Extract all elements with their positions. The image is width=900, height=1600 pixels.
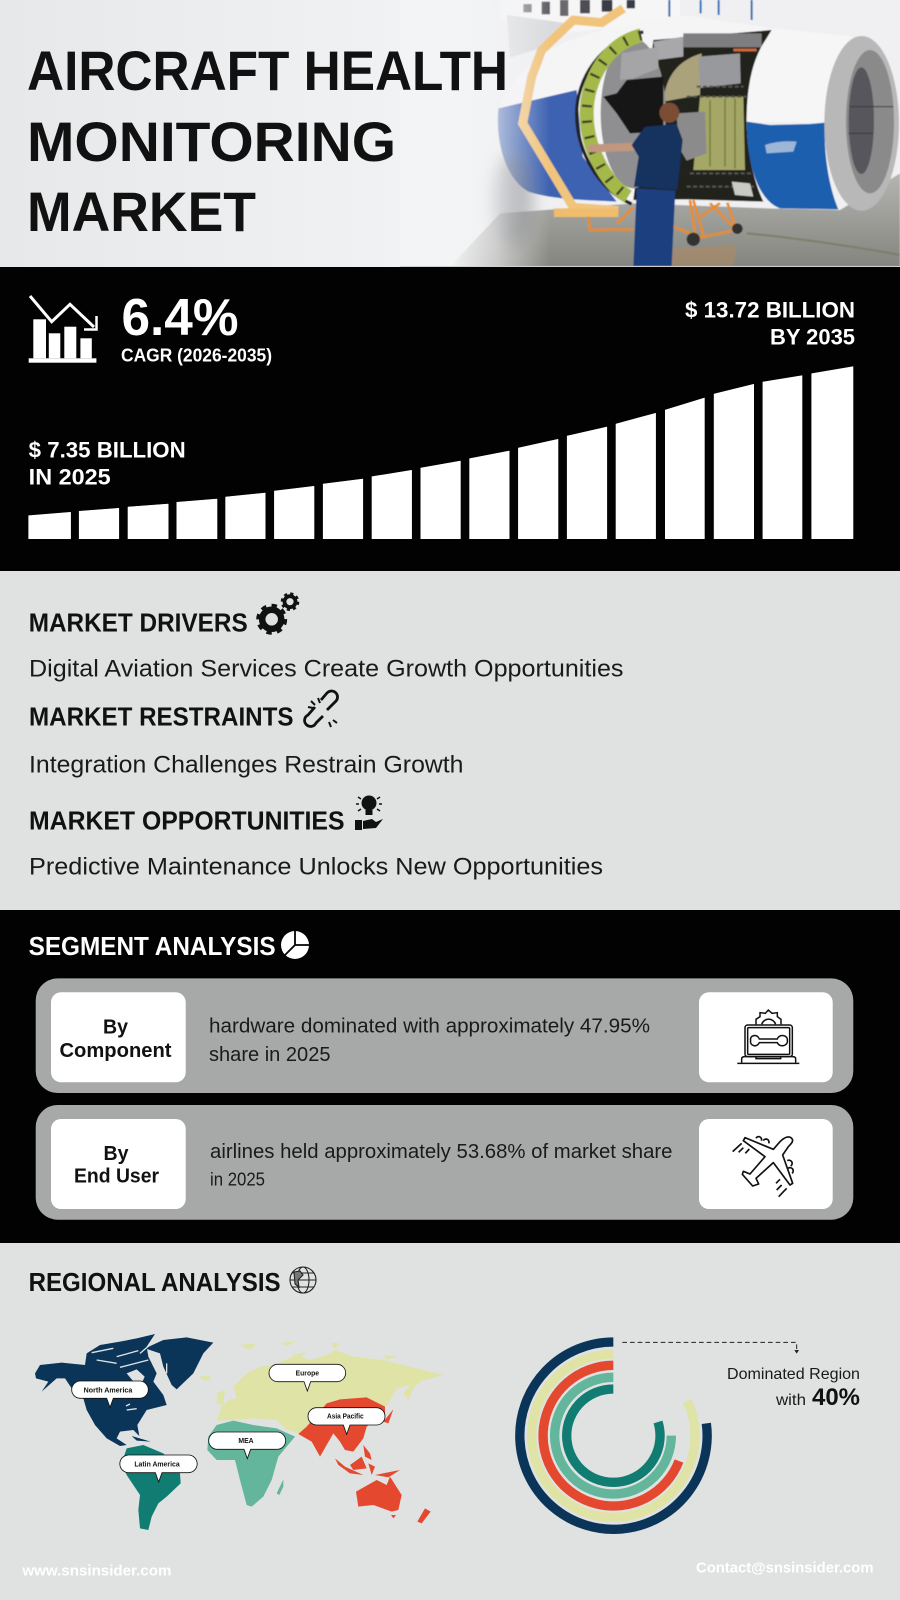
title (27, 39, 508, 243)
icon: laptop with wrench (737, 1010, 799, 1063)
text: end user finding: airlines held approximately 53.68% of market share (210, 1141, 672, 1163)
region: Europe and North Asia (200, 1342, 443, 1433)
icon: chart with declining arrow (29, 296, 97, 363)
2035 value: $ 13.72 BILLION (685, 298, 855, 323)
text: driver: Digital Aviation Services Create Growth Opportunities (29, 656, 624, 683)
icon: airplane (733, 1137, 793, 1197)
callout: Latin America (120, 1455, 197, 1482)
label: by end user: By (104, 1143, 129, 1165)
heading: market drivers: MARKET DRIVERS (29, 610, 248, 638)
heading: market opportunities: MARKET OPPORTUNITIES (29, 807, 344, 835)
text: component finding: share in 2025 (209, 1044, 330, 1066)
callout: Europe (269, 1364, 346, 1391)
title: AIRCRAFT HEALTH (27, 39, 508, 102)
CAGR label: CAGR (2026-2035) (121, 346, 272, 366)
callout: MEA: MEA (238, 1438, 254, 1445)
panel: market dynamics (0, 571, 900, 910)
icon: pie chart (281, 931, 309, 959)
panel: market size (0, 267, 900, 571)
2035 value: BY 2035 (770, 325, 855, 350)
callout: Latin America: Latin America (134, 1461, 180, 1468)
label: by end user: End User (74, 1166, 159, 1188)
panel: header (0, 0, 900, 267)
2025 value (29, 438, 186, 490)
title: MARKET (27, 180, 256, 243)
callout: dominated region: 40% (812, 1384, 860, 1411)
label: by component: By (103, 1017, 129, 1039)
footer: contact: Contact@snsinsider.com (696, 1560, 874, 1576)
2025 value: IN 2025 (29, 465, 111, 490)
callout: dominated region: with (775, 1392, 806, 1409)
world map (35, 1334, 443, 1530)
row: by end user (36, 1105, 853, 1220)
heading: market restraints: MARKET RESTRAINTS (29, 704, 294, 732)
text: opportunity: Predictive Maintenance Unlocks New Opportunities (29, 853, 603, 880)
panel: segment analysis (0, 910, 900, 1243)
callout: North America (72, 1381, 148, 1407)
region: North America (35, 1334, 213, 1446)
icon: bulb in hand (355, 796, 383, 830)
row: by component (36, 978, 853, 1093)
label: by component (60, 1017, 172, 1062)
heading: regional analysis: REGIONAL ANALYSIS (29, 1269, 281, 1297)
CAGR value: 6.4% (122, 289, 238, 347)
text: end user finding (210, 1141, 672, 1190)
region: MEA (207, 1421, 295, 1507)
text: end user finding: in 2025 (210, 1169, 265, 1190)
icon: globe (290, 1267, 316, 1293)
callout: MEA (209, 1432, 286, 1459)
2035 value (685, 298, 855, 350)
callout: dominated region (727, 1366, 860, 1411)
text: restraint: Integration Challenges Restrain Growth (29, 751, 464, 778)
region: Asia Pacific (298, 1397, 431, 1523)
text: component finding: hardware dominated with approximately 47.95% (209, 1016, 650, 1038)
callout: North America: North America (84, 1387, 132, 1394)
callout: Europe: Europe (296, 1371, 319, 1378)
region: Latin America (122, 1445, 181, 1530)
footer: website: www.snsinsider.com (21, 1562, 171, 1580)
2025 value: $ 7.35 BILLION (29, 438, 186, 463)
label: by component: Component (60, 1040, 172, 1062)
title: MONITORING (27, 110, 396, 173)
panel: regional analysis (0, 1243, 900, 1600)
callout: Asia Pacific: Asia Pacific (327, 1414, 364, 1421)
callout: dominated region: Dominated Region (727, 1366, 860, 1383)
heading: segment analysis: SEGMENT ANALYSIS (29, 933, 276, 961)
bar chart: market growth (29, 367, 853, 539)
dashed arrow (622, 1342, 799, 1354)
callout: Asia Pacific (308, 1408, 385, 1434)
photo: aircraft engine under maintenance (400, 0, 900, 267)
icon: broken chain (305, 691, 338, 727)
label: by end user (74, 1143, 159, 1188)
icon: gears (258, 594, 298, 633)
radial bar chart (520, 1342, 799, 1529)
text: component finding (209, 1016, 650, 1066)
